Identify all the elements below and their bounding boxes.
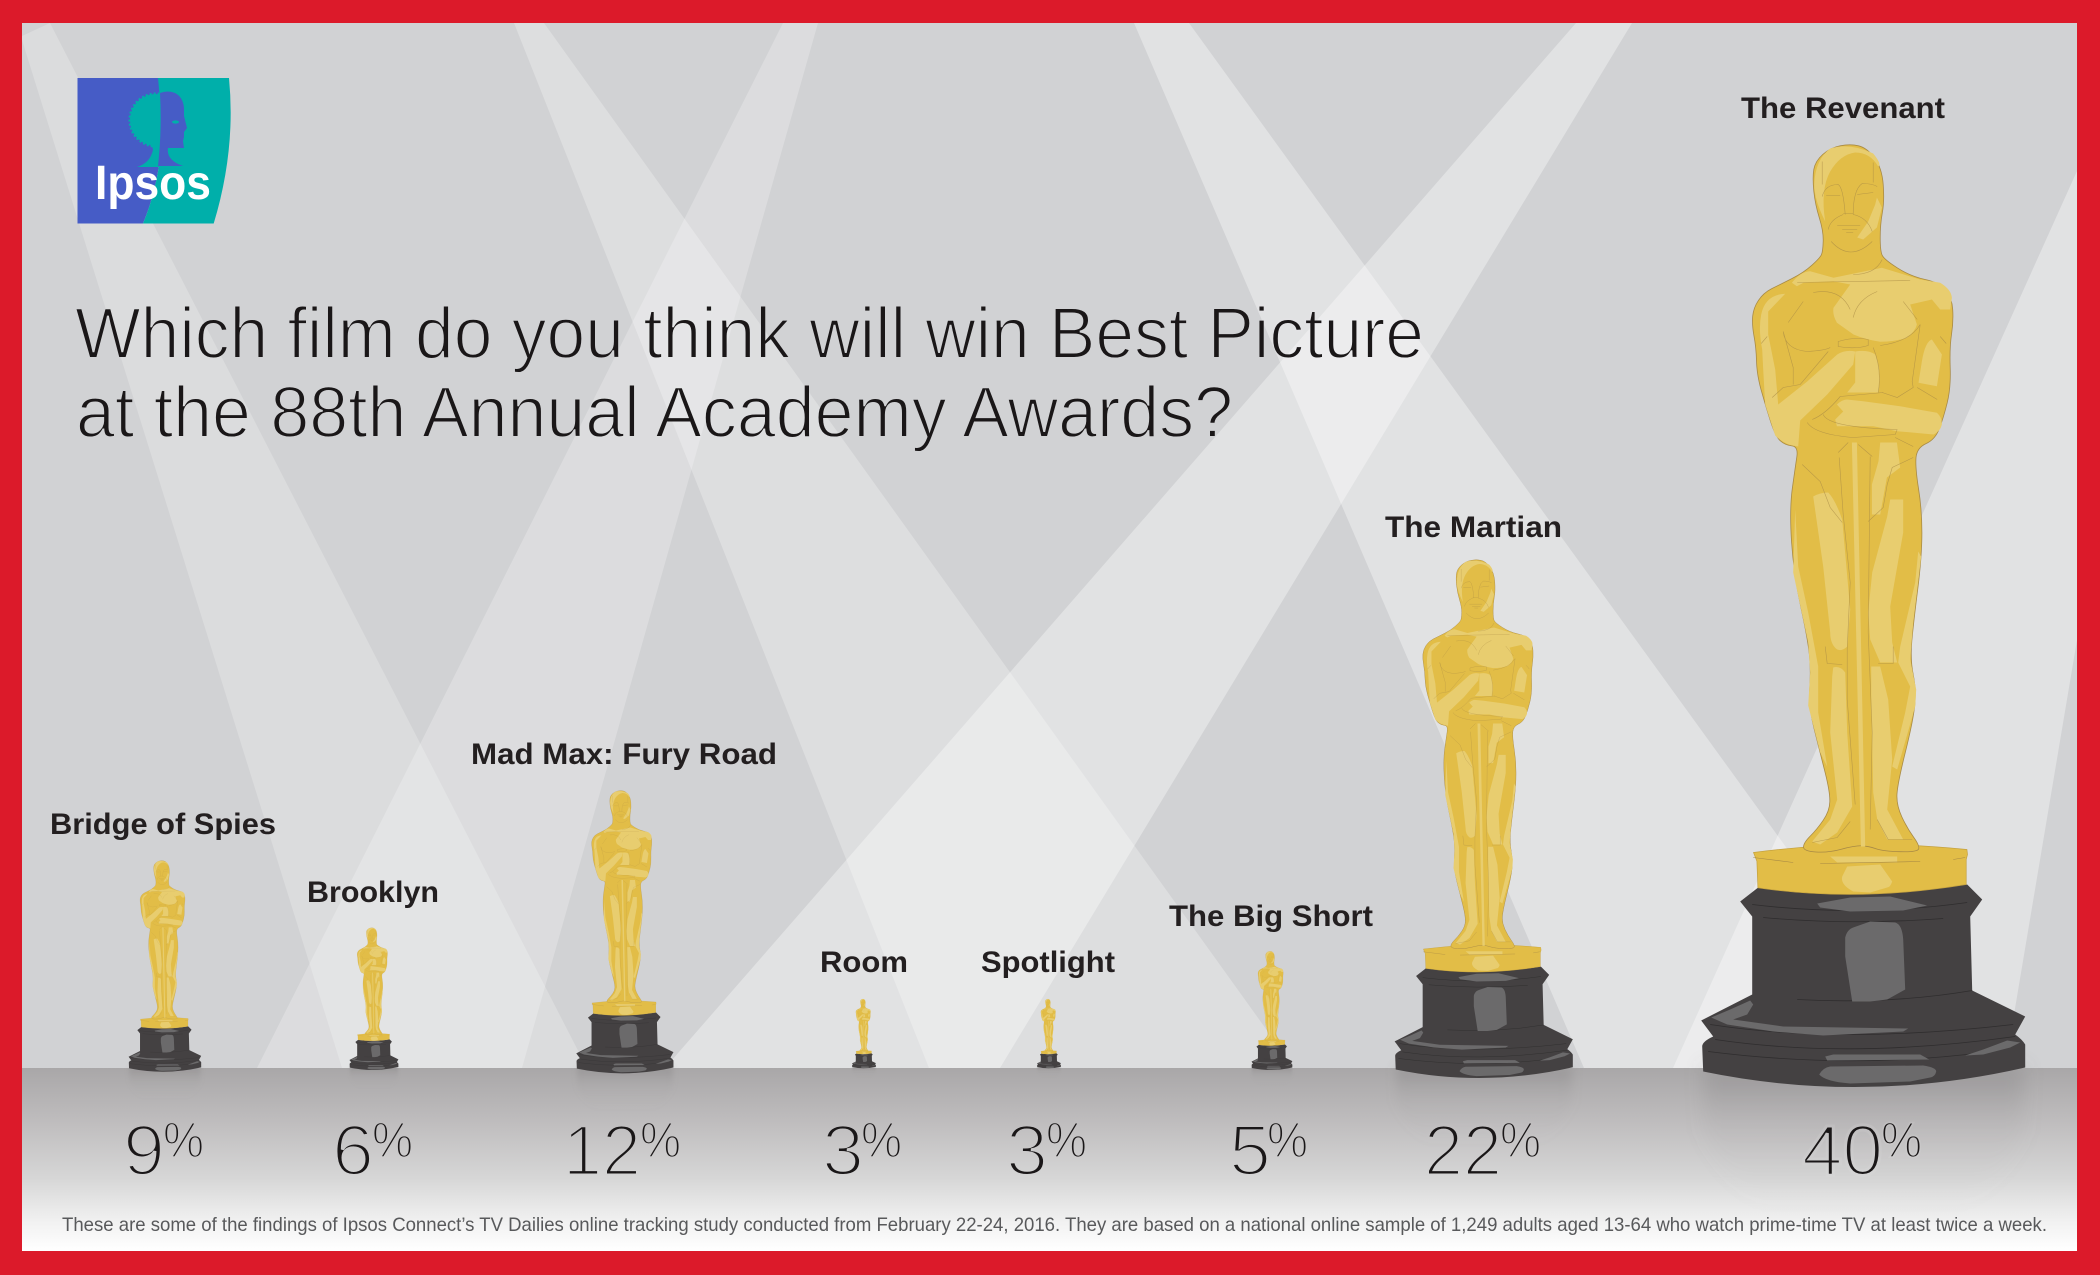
logo wordmark: Ipsos [95, 157, 211, 210]
value: 12% [563, 1112, 681, 1191]
statue: The Martian [1395, 560, 1573, 1078]
title: Which film do you think will win Best Picture [75, 294, 1424, 374]
value: 9% [123, 1112, 204, 1191]
statue: Spotlight [1037, 999, 1061, 1068]
value: 5% [1229, 1112, 1308, 1191]
floor [22, 1068, 2077, 1251]
film labels [50, 92, 1945, 979]
title: at the 88th Annual Academy Awards? [76, 373, 1233, 453]
value: 12%: % [640, 1112, 681, 1168]
value: 5%: % [1267, 1112, 1308, 1168]
statue: Room [852, 999, 876, 1068]
icon: head half [158, 92, 187, 166]
value: 6%: % [372, 1112, 413, 1168]
statue: The Big Short [1252, 951, 1292, 1070]
value: 9%: % [163, 1112, 204, 1168]
label: The Martian: The Martian [1385, 511, 1562, 544]
value: 12%: 12 [563, 1112, 641, 1191]
title [75, 294, 1424, 453]
value: 40% [1802, 1112, 1922, 1191]
value: 5%: 5 [1229, 1112, 1271, 1191]
value: 3% Spotlight [1006, 1112, 1087, 1191]
statue: Mad Max: Fury Road [576, 791, 673, 1073]
value: 40%: % [1881, 1112, 1922, 1168]
label: Bridge of Spies: Bridge of Spies [50, 808, 276, 841]
logo: Ipsos [78, 78, 231, 224]
value: 3% Spotlight: 3 [1006, 1112, 1048, 1191]
label: Brooklyn: Brooklyn [307, 876, 439, 909]
percentages [123, 1112, 1922, 1191]
label: Mad Max: Fury Road: Mad Max: Fury Road [471, 738, 777, 771]
value: 3% Room: 3 [822, 1112, 864, 1191]
value: 9%: 9 [123, 1112, 165, 1191]
value: 40%: 40 [1802, 1112, 1883, 1191]
statue: Brooklyn [349, 928, 398, 1070]
footnote: These are some of the findings of Ipsos Connect’s TV Dailies online tracking study conducted from February 22-24, 2016. They are based on a national online sample of 1,249 adults aged 13-64 who watch prime-time TV at least twice a week. [62, 1214, 2047, 1236]
value: 6% [332, 1112, 413, 1191]
value: 22% [1424, 1112, 1541, 1191]
value: 3% Room [822, 1112, 902, 1191]
value: 22%: 22 [1424, 1112, 1502, 1191]
icon: tree half [130, 94, 182, 167]
label: Spotlight: Spotlight [981, 946, 1115, 979]
label: The Revenant: The Revenant [1741, 92, 1945, 125]
value: 6%: 6 [332, 1112, 374, 1191]
floor reflections of the statues [129, 1067, 2024, 1207]
value: 3% Spotlight: % [1046, 1112, 1087, 1168]
icon: head eye [172, 120, 179, 124]
label: The Big Short: The Big Short [1169, 900, 1373, 933]
statue: Bridge of Spies [129, 861, 201, 1072]
label: Room: Room [820, 946, 908, 979]
value: 22%: % [1500, 1112, 1541, 1168]
value: 3% Room: % [861, 1112, 902, 1168]
statue: The Revenant [1701, 145, 2025, 1087]
